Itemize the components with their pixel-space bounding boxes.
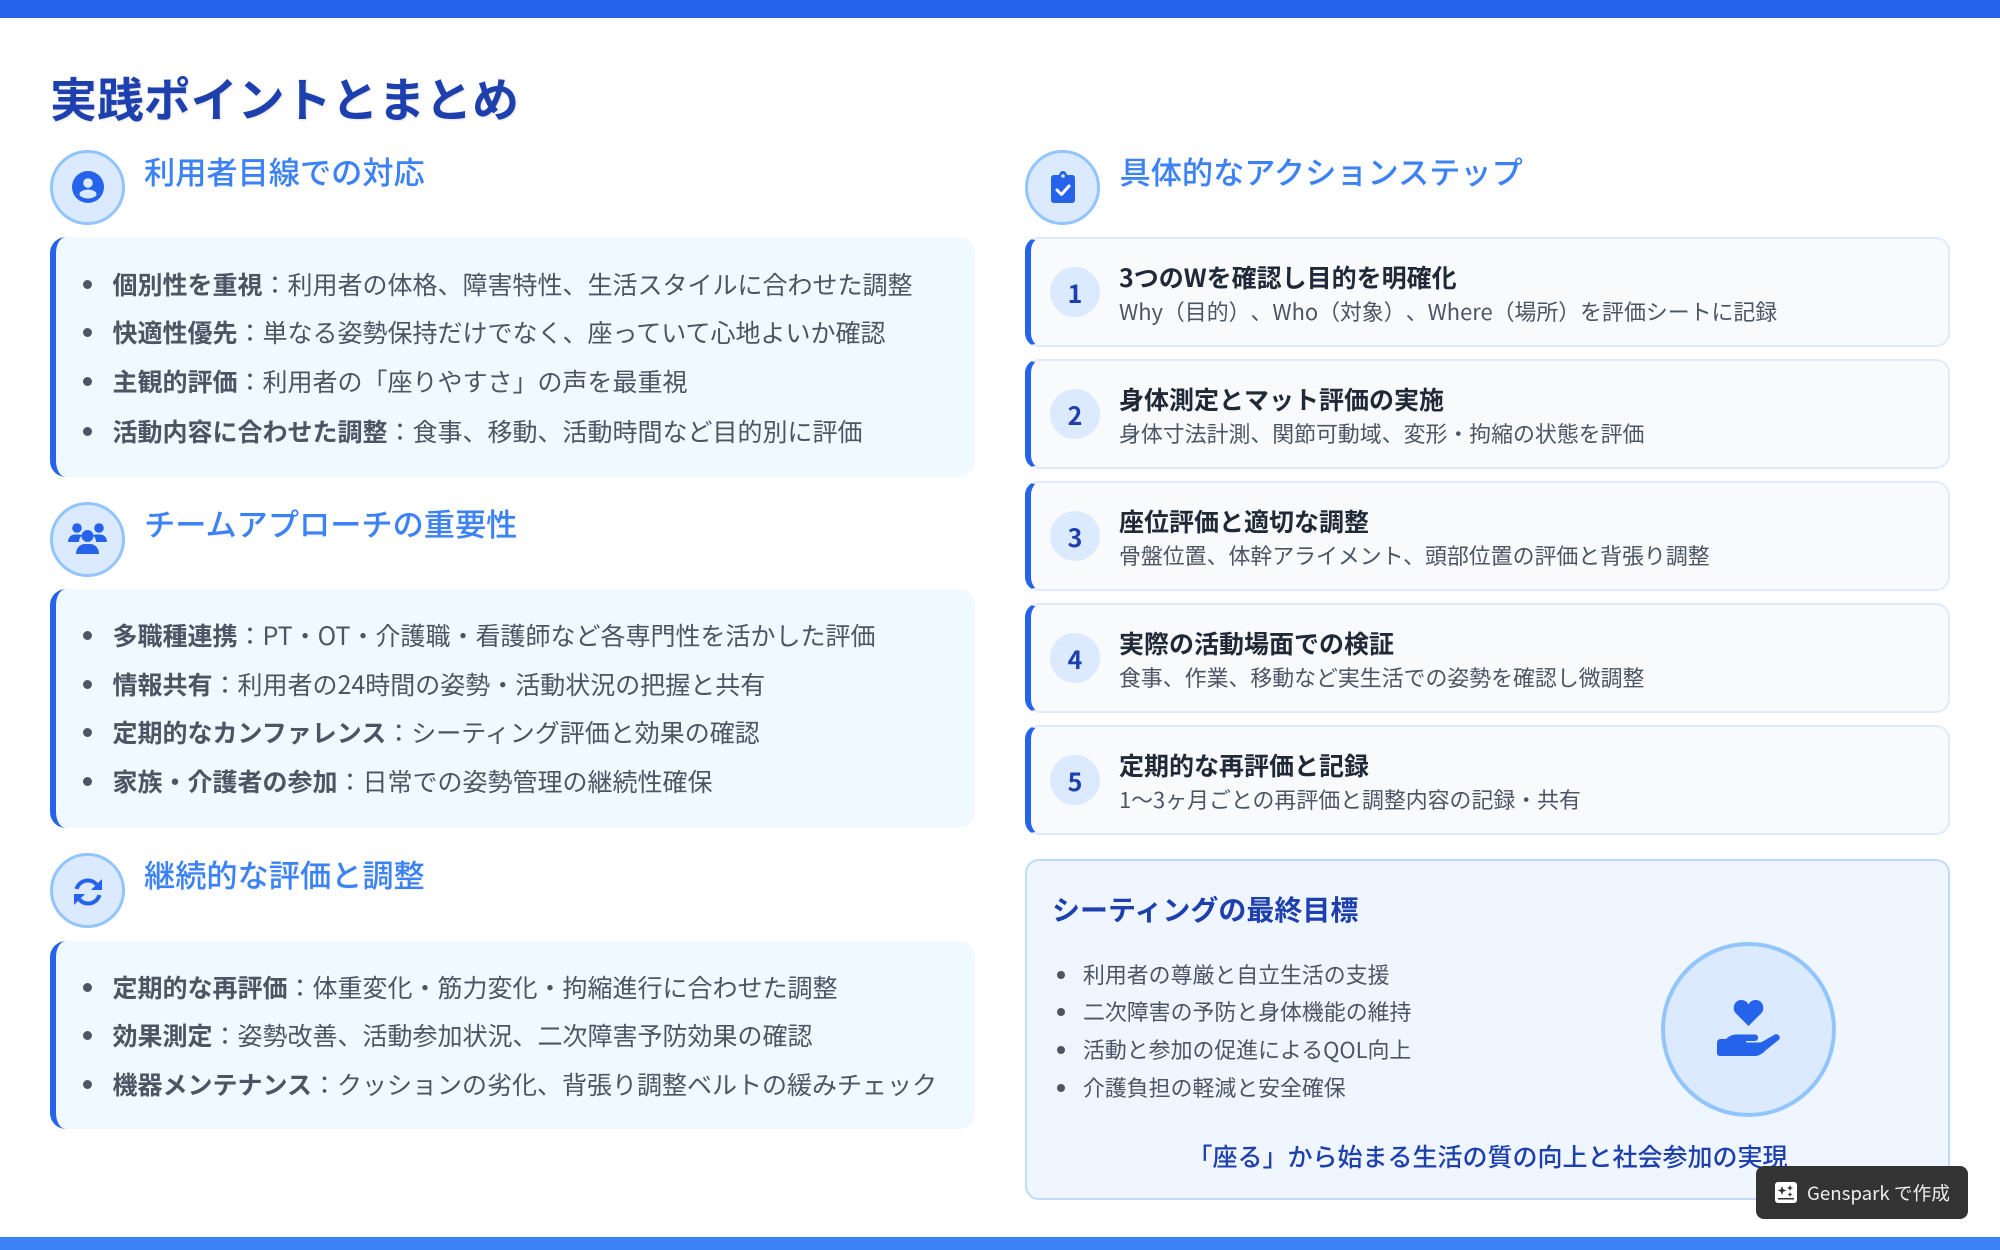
step 3 <box>1025 481 1950 591</box>
icon: clipboard check <box>1025 150 1100 225</box>
panel: team approach <box>50 589 975 828</box>
step 3: 座位評価と適切な調整 <box>1119 503 1369 539</box>
heading: final goal: シーティングの最終目標 <box>1052 889 1358 929</box>
step 4: 4 <box>1068 641 1082 677</box>
icon: hand holding heart <box>1661 942 1836 1117</box>
list: team approach: 多職種連携：PT・OT・介護職・看護師など各専門性を活かした評価 <box>112 617 876 653</box>
list: user perspective: 快適性優先：単なる姿勢保持だけでなく、座っていて心地よいか確認 <box>112 314 886 350</box>
heading: user perspective: 利用者目線での対応 <box>144 148 425 193</box>
panel: user perspective <box>50 237 975 477</box>
step 1 <box>1025 237 1950 347</box>
step 2: 2 <box>1068 397 1082 433</box>
bottom bar <box>0 1237 2000 1250</box>
list: final goal: 利用者の尊厳と自立生活の支援 <box>1083 959 1389 990</box>
icon: team <box>50 502 125 577</box>
list: user perspective: 活動内容に合わせた調整：食事、移動、活動時間など目的別に評価 <box>112 413 863 449</box>
list: team approach <box>83 617 876 799</box>
heading: team approach: チームアプローチの重要性 <box>144 500 517 545</box>
step 1: 1 <box>1068 275 1082 311</box>
step 4: 実際の活動場面での検証 <box>1119 625 1394 661</box>
icon: sync <box>50 853 125 928</box>
step 5: 1〜3ヶ月ごとの再評価と調整内容の記録・共有 <box>1119 784 1581 815</box>
list: user perspective: 主観的評価：利用者の「座りやすさ」の声を最重視 <box>112 363 688 399</box>
closing statement: 「座る」から始まる生活の質の向上と社会参加の実現 <box>1187 1138 1788 1174</box>
list: final goal <box>1057 959 1411 1103</box>
list: continuous evaluation: 定期的な再評価：体重変化・筋力変化・拘縮進行に合わせた調整 <box>112 969 838 1005</box>
step 3: 3 <box>1068 519 1082 555</box>
panel: final goal <box>1025 859 1950 1200</box>
list: final goal: 介護負担の軽減と安全確保 <box>1083 1072 1346 1103</box>
step 5 <box>1025 725 1950 835</box>
list: continuous evaluation: 機器メンテナンス：クッションの劣化、背張り調整ベルトの緩みチェック <box>112 1066 937 1102</box>
list: final goal: 二次障害の予防と身体機能の維持 <box>1083 996 1411 1027</box>
step 5: 定期的な再評価と記録 <box>1119 747 1369 783</box>
list: team approach: 定期的なカンファレンス：シーティング評価と効果の確認 <box>112 714 760 750</box>
top bar <box>0 0 2000 18</box>
step 4 <box>1025 603 1950 713</box>
heading: continuous evaluation: 継続的な評価と調整 <box>144 851 425 896</box>
list: user perspective <box>83 266 913 449</box>
list: continuous evaluation <box>83 969 937 1102</box>
icon: user <box>50 150 125 225</box>
list: team approach: 家族・介護者の参加：日常での姿勢管理の継続性確保 <box>112 763 713 799</box>
step 2 <box>1025 359 1950 469</box>
list: continuous evaluation: 効果測定：姿勢改善、活動参加状況、二次障害予防効果の確認 <box>112 1017 813 1053</box>
panel: continuous evaluation <box>50 941 975 1129</box>
step 2: 身体測定とマット評価の実施 <box>1119 381 1444 417</box>
list: user perspective: 個別性を重視：利用者の体格、障害特性、生活スタイルに合わせた調整 <box>112 266 913 302</box>
list: final goal: 活動と参加の促進によるQOL向上 <box>1083 1034 1411 1065</box>
icon: sparkle <box>1775 1182 1797 1203</box>
step 5: 5 <box>1068 763 1082 799</box>
badge: Genspark <box>1756 1166 1968 1219</box>
step 2: 身体寸法計測、関節可動域、変形・拘縮の状態を評価 <box>1119 418 1644 449</box>
step 3: 骨盤位置、体幹アライメント、頭部位置の評価と背張り調整 <box>1119 540 1710 571</box>
heading: action steps: 具体的なアクションステップ <box>1120 148 1523 193</box>
badge label: Genspark で作成 <box>1807 1179 1950 1206</box>
title: 実践ポイントとまとめ <box>50 63 519 131</box>
step 1: 3つのWを確認し目的を明確化 <box>1119 259 1457 295</box>
step 1: Why（目的）、Who（対象）、Where（場所）を評価シートに記録 <box>1119 296 1777 327</box>
step 4: 食事、作業、移動など実生活での姿勢を確認し微調整 <box>1119 662 1644 693</box>
list: team approach: 情報共有：利用者の24時間の姿勢・活動状況の把握と共有 <box>112 666 765 702</box>
